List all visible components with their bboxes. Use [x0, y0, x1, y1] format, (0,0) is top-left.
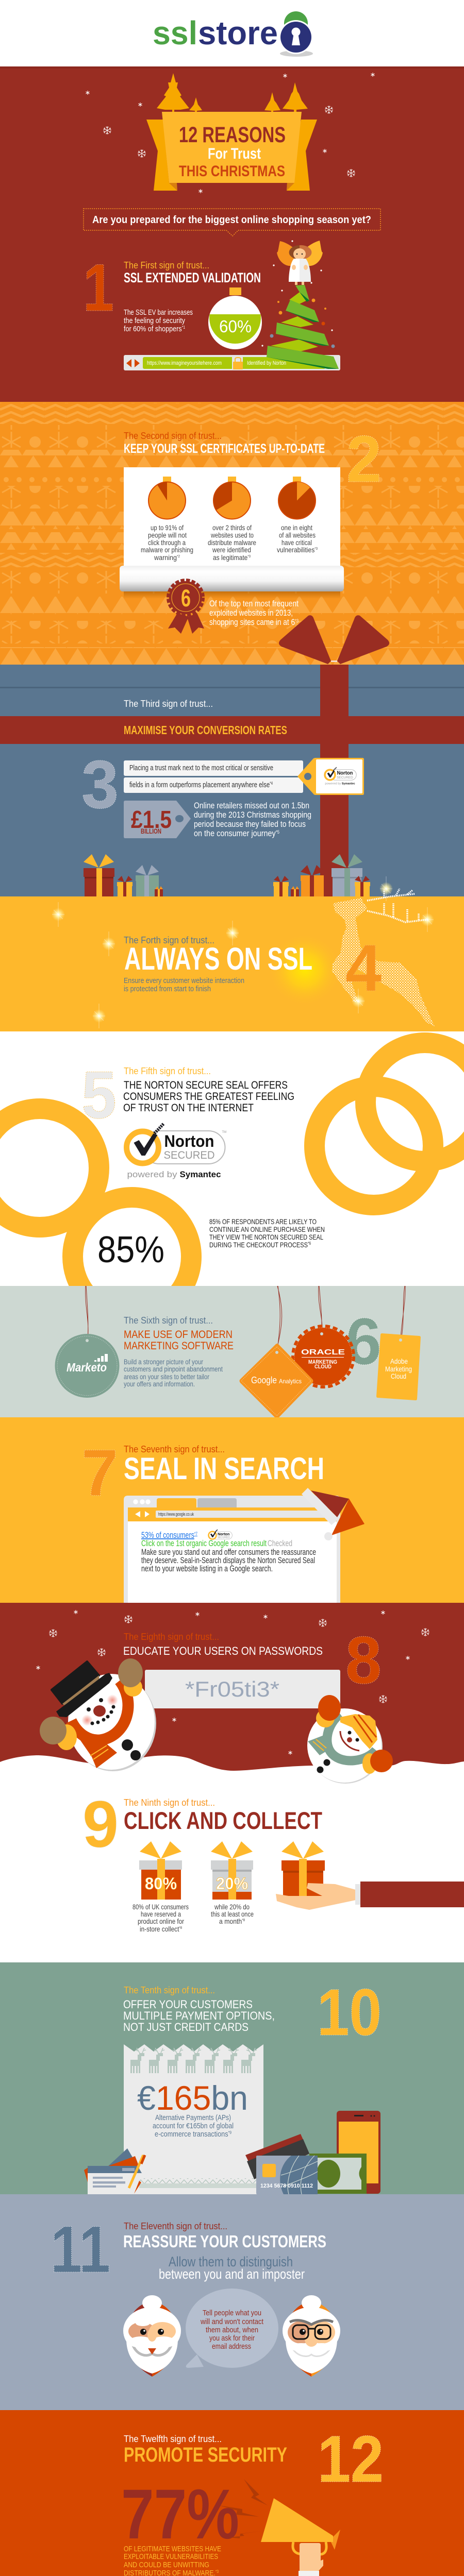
sign 2 heading: KEEP YOUR SSL CERTIFICATES UP-TO-DATE	[124, 442, 325, 456]
phone	[337, 2111, 380, 2194]
gift 80 percent	[139, 1841, 182, 1900]
Norton secured logo: Norton	[164, 1132, 214, 1150]
speech bubble	[186, 2289, 278, 2368]
price tag £1.5 billion: £1.5	[131, 806, 172, 834]
receipt caption: account for €165bn of global	[153, 2122, 234, 2130]
white paper scroll	[120, 467, 344, 599]
Oracle tag: MARKETING	[308, 1359, 337, 1365]
sign 4 body	[124, 977, 244, 993]
gift 80 caption: *8	[179, 1926, 182, 1930]
pie ornament 91%: malware or phishing	[141, 546, 193, 554]
Norton gift tag: SECURED	[337, 776, 353, 779]
77 percent figure: 77%	[121, 2475, 239, 2554]
sound bolts	[219, 2479, 268, 2538]
number 9: 9	[82, 1788, 119, 1861]
Adobe Marketing Cloud tag: Marketing	[385, 1365, 412, 1373]
Oracle tag: CLOUD	[314, 1364, 332, 1370]
front credit card	[256, 2156, 318, 2194]
sign 3 heading: MAXIMISE YOUR CONVERSION RATES	[124, 723, 287, 737]
pie ornament two thirds: over 2 thirds of	[212, 523, 252, 532]
sparkles	[52, 876, 434, 1028]
panel: sign 7 seal in search	[0, 1417, 464, 1603]
front credit card: 1234 5678 0910 1112	[260, 2183, 313, 2189]
gift 80 caption: in-store collect	[140, 1925, 186, 1933]
pie ornament 91%: *2	[177, 555, 180, 558]
hand holding megaphone	[296, 2543, 323, 2576]
ornament 60%	[208, 287, 262, 349]
pie ornament 91%: people will not	[148, 531, 187, 539]
pie ornament 91%: warning	[154, 553, 179, 562]
cheque book and pen	[84, 2148, 145, 2196]
speech bubble: email address	[212, 2342, 251, 2351]
interlocking gold rings	[0, 1043, 464, 1316]
gift 20 percent	[211, 1841, 253, 1900]
Norton gift tag: Symantec	[342, 783, 355, 786]
sign 11 kicker: The Eleventh sign of trust...	[124, 2221, 227, 2231]
pie ornament two thirds: websites used to	[210, 531, 254, 539]
sign 5 heading: THE NORTON SECURE SEAL OFFERS	[124, 1079, 288, 1091]
receipt	[124, 2044, 263, 2194]
77 percent caption: *3	[216, 2569, 219, 2574]
snow drift	[0, 1755, 464, 1962]
search result text: they deserve. Seal-in-Search displays the Norton Secured Seal	[141, 1555, 315, 1565]
gift bow	[279, 615, 389, 664]
pie ornament one in eight	[277, 477, 318, 554]
gift 80 percent: 80%	[145, 1874, 177, 1893]
Santa left	[123, 2295, 181, 2377]
pie ornament one in eight: of all websites	[279, 531, 316, 539]
number 11: 11	[51, 2213, 110, 2286]
mini Norton seal	[209, 1530, 232, 1539]
sparkling reindeer	[332, 889, 435, 1026]
Adobe Marketing Cloud tag: Adobe	[390, 1357, 408, 1365]
panel: title section	[0, 66, 464, 402]
Norton secured logo: powered by	[127, 1170, 177, 1179]
search result text: Checked	[268, 1538, 292, 1548]
sign 6 body: Build a stronger picture of your	[124, 1358, 203, 1366]
Marketo tag: Marketo	[67, 1361, 107, 1374]
85 percent caption	[209, 1217, 325, 1249]
sign 7 kicker: The Seventh sign of trust...	[124, 1444, 225, 1454]
sign 1 body text	[124, 308, 193, 333]
sign 1 body text: the feeling of security	[124, 316, 185, 325]
number 12: 12	[318, 2422, 384, 2496]
receipt caption: Alternative Payments (APs)	[155, 2113, 231, 2122]
sign 5 heading: OF TRUST ON THE INTERNET	[123, 1102, 254, 1114]
search result text: *7	[194, 1531, 197, 1536]
search result text: Make sure you stand out and offer consumers the reassurance	[141, 1547, 316, 1557]
pie ornament 91%: up to 91% of	[151, 523, 184, 532]
Adobe Marketing Cloud tag: Cloud	[391, 1372, 406, 1380]
pie ornament two thirds: were identified	[212, 546, 251, 554]
rosette caption	[209, 599, 299, 627]
sign 9 heading: CLICK AND COLLECT	[124, 1807, 322, 1834]
glow	[268, 933, 342, 1007]
Santa right with glasses	[283, 2295, 340, 2377]
sign 12 kicker: The Twelfth sign of trust...	[124, 2434, 222, 2444]
receipt caption	[153, 2113, 234, 2139]
gift 80 caption: 80% of UK consumers	[132, 1903, 189, 1911]
sign 11 heading: REASSURE YOUR CUSTOMERS	[123, 2232, 326, 2251]
Norton gift tag: powered by	[325, 783, 341, 786]
85 percent caption: 85% OF RESPONDENTS ARE LIKELY TO	[209, 1217, 317, 1226]
ornament 60%: 60%	[219, 317, 252, 336]
megaphone	[261, 2498, 340, 2554]
panel: sign 12 promote security	[0, 2410, 464, 2576]
sign 5 heading: CONSUMERS THE GREATEST FEELING	[123, 1091, 294, 1103]
panel: sign 11 reassure customers	[0, 2194, 464, 2410]
Oracle tag: ORACLE	[301, 1348, 345, 1357]
receipt caption: e-commerce transactions	[155, 2130, 241, 2139]
knitted background pattern	[0, 403, 464, 665]
sign 10 kicker: The Tenth sign of trust...	[124, 1985, 215, 1995]
browser window	[124, 1496, 340, 1603]
gift 20 caption: a month	[219, 1917, 245, 1925]
number 1: 1	[83, 250, 114, 325]
sign 11 subheading	[159, 2254, 305, 2282]
hand and sleeve	[276, 1882, 464, 1910]
logo keyhole	[279, 20, 313, 54]
sign 1 heading: SSL EXTENDED VALIDATION	[124, 270, 261, 285]
search result text: next to your website listing in a Google search.	[141, 1564, 273, 1573]
gift 80 caption	[132, 1903, 189, 1933]
EV address bar: https://www.imagineyoursitehere.com	[147, 360, 222, 366]
sign 10 heading	[123, 1998, 275, 2033]
receipt caption: *9	[228, 2130, 231, 2135]
title: this christmas: THIS CHRISTMAS	[179, 163, 285, 180]
77 percent caption	[124, 2545, 221, 2576]
gift 20 caption	[211, 1903, 254, 1925]
retailer statistic text: Online retailers missed out on 1.5bn	[194, 801, 309, 810]
number 2: 2	[346, 422, 382, 496]
pie ornament one in eight: vulnerabilities	[277, 546, 321, 554]
pie ornament two thirds: distribute malware	[208, 538, 256, 547]
password box	[145, 1670, 340, 1708]
sign 6 kicker: The Sixth sign of trust...	[124, 1315, 213, 1326]
banner front	[162, 112, 302, 183]
search result text: 53% of consumers	[141, 1530, 214, 1540]
sign 4 kicker: The Forth sign of trust...	[124, 935, 214, 945]
logo wordmark store: store	[198, 14, 278, 52]
rosette number 6	[168, 581, 204, 634]
77 percent caption: OF LEGITIMATE WEBSITES HAVE	[124, 2545, 221, 2553]
sign 7 heading: SEAL IN SEARCH	[124, 1451, 324, 1486]
sign 4 body: is protected from start to finish	[124, 985, 211, 993]
Norton secured logo: Symantec	[179, 1170, 221, 1179]
speech bubble: you ask for their	[209, 2334, 255, 2343]
Norton gift tag: Norton	[337, 771, 353, 776]
password box: *Fr05ti3*	[185, 1677, 279, 1701]
gift 20 caption: *8	[242, 1919, 245, 1922]
gift 20 percent: 20%	[216, 1874, 248, 1893]
sign 5 kicker: The Fifth sign of trust...	[124, 1066, 211, 1076]
Adobe Marketing Cloud tag	[376, 1333, 421, 1400]
sign 6 heading: MARKETING SOFTWARE	[124, 1340, 234, 1352]
Norton gift tag	[297, 758, 364, 795]
sign 1 body text: for 60% of shoppers	[124, 325, 193, 333]
pine trees	[157, 73, 308, 112]
speech bubble: Tell people what you	[203, 2309, 261, 2317]
mini Norton seal: Norton	[218, 1532, 230, 1536]
panel: sign 2 certificates	[0, 402, 464, 665]
snowman with top hat	[40, 1658, 156, 1771]
header: SSL Store logo	[0, 0, 464, 66]
77 percent caption: EXPLOITABLE VULNERABILITIES	[124, 2552, 218, 2561]
search result text	[141, 1530, 316, 1573]
browser window: https://www.google.co.uk	[158, 1512, 194, 1517]
gift 20 caption: while 20% do	[214, 1903, 250, 1911]
sign 6 body: your offers and information.	[124, 1380, 195, 1388]
gift ribbon horizontal	[0, 716, 464, 744]
reindeer row	[130, 2048, 257, 2073]
amount €165bn: €165bn	[137, 2079, 248, 2117]
sign 6 body	[124, 1358, 223, 1388]
panel: sign 9 click and collect	[82, 1788, 464, 1933]
panel: sign 8 passwords	[0, 1603, 464, 1962]
price tag £1.5 billion	[124, 801, 191, 838]
snowflakes	[86, 73, 374, 193]
retailer statistic text	[194, 801, 311, 838]
sign 10 heading: MULTIPLE PAYMENT OPTIONS,	[123, 2009, 275, 2022]
sign 11 subheading: between you and an imposter	[159, 2266, 305, 2282]
85 percent caption: THEY VIEW THE NORTON SECURED SEAL	[209, 1233, 323, 1241]
mini Norton seal: SECURED	[218, 1536, 230, 1539]
77 percent caption: AND COULD BE UNWITTING	[124, 2561, 209, 2569]
pie ornament two thirds: *3	[247, 555, 251, 558]
sign 4 body: Ensure every customer website interaction	[124, 977, 244, 985]
pie ornament one in eight: *3	[314, 547, 318, 551]
pie ornament one in eight: one in eight	[281, 523, 312, 532]
Oracle tag	[293, 1327, 353, 1386]
number 10: 10	[317, 1976, 382, 2049]
gift 80 caption: product online for	[138, 1917, 184, 1925]
rosette caption: shopping sites came in at 6	[209, 617, 316, 627]
number 3: 3	[81, 747, 119, 822]
gift 20 caption: this at least once	[211, 1910, 254, 1918]
EV address bar	[124, 355, 340, 370]
85 percent caption: *6	[308, 1241, 311, 1246]
retailer statistic text: during the 2013 Christmas shopping	[194, 810, 311, 820]
pie ornament 91%	[141, 477, 193, 562]
sign 9 kicker: The Ninth sign of trust...	[124, 1798, 215, 1808]
gift held in hand	[281, 1841, 325, 1900]
gift ribbon vertical	[320, 665, 349, 896]
back credit card	[245, 2134, 309, 2181]
title: for trust: For Trust	[208, 145, 261, 162]
85 percent caption: CONTINUE AN ONLINE PURCHASE WHEN	[209, 1225, 325, 1233]
sign 10 heading: NOT JUST CREDIT CARDS	[123, 2021, 248, 2033]
sign 6 heading	[124, 1329, 234, 1352]
trust mark statement bars: fields in a form outperforms placement anywhere else	[129, 781, 313, 789]
speech bubble: them about, when	[206, 2326, 258, 2334]
retailer statistic text: on the consumer journey	[194, 828, 290, 838]
tag strings	[86, 1286, 405, 1352]
price tag £1.5 billion: BILLION	[141, 827, 161, 835]
sign 11 subheading: Allow them to distinguish	[169, 2254, 293, 2269]
sign 12 heading: PROMOTE SECURITY	[124, 2444, 287, 2466]
title: 12 reasons: 12 REASONS	[179, 123, 286, 147]
sign 6 body: customers and pinpoint abandonment	[124, 1365, 223, 1373]
Google Analytics tag	[239, 1344, 313, 1418]
pie ornament two thirds	[208, 477, 256, 562]
logo green arc	[284, 11, 308, 35]
rosette caption: Of the top ten most frequent	[209, 599, 299, 608]
sign 6 body: areas on your sites to better tailor	[124, 1372, 209, 1381]
trust mark statement bars	[124, 760, 303, 793]
rosette caption: *3	[295, 618, 299, 623]
retailer statistic text: *5	[276, 829, 279, 835]
sign 8 kicker: The Eighth sign of trust...	[124, 1632, 219, 1642]
sign 1 body text: The SSL EV bar increases	[124, 308, 193, 317]
panel: sign 5 Norton seal	[0, 1031, 464, 1316]
pie ornament two thirds: as legitimate	[213, 553, 254, 562]
sign 10 heading: OFFER YOUR CUSTOMERS	[123, 1998, 253, 2011]
Marketo tag	[55, 1334, 120, 1398]
gift 80 caption: have reserved a	[141, 1910, 181, 1918]
tree decorations	[261, 240, 335, 348]
Google Analytics tag: Google	[251, 1375, 277, 1385]
pie ornament one in eight: have critical	[281, 538, 312, 547]
sign 5 heading	[123, 1079, 294, 1114]
number 4: 4	[345, 931, 382, 1005]
sign 1 body text: *1	[182, 325, 185, 330]
rosette number 6: 6	[181, 584, 191, 612]
rosette caption: exploited websites in 2013,	[209, 608, 293, 618]
panel: sign 6 marketing software	[0, 1286, 464, 1418]
question callout box: Are you prepared for the biggest online shopping season yet?	[92, 214, 371, 226]
sign 3 kicker: The Third sign of trust...	[124, 699, 213, 709]
Norton secured logo: TM	[222, 1131, 226, 1134]
sign 1 kicker: The First sign of trust...	[124, 260, 209, 270]
trust mark statement bars: Placing a trust mark next to the most critical or sensitive	[129, 764, 273, 772]
gifts right group	[273, 854, 370, 896]
number 6: 6	[345, 1305, 382, 1379]
sign 2 kicker: The Second sign of trust...	[124, 431, 222, 441]
number 5: 5	[81, 1057, 117, 1132]
origami ribbon tree	[267, 285, 339, 369]
Google Analytics tag: Analytics	[279, 1378, 302, 1385]
speech bubble: will and won't contact	[200, 2317, 264, 2326]
panel: sign 4 always on SSL	[0, 876, 464, 1031]
snowman with bobble hat	[307, 1695, 393, 1784]
banknote	[309, 2154, 367, 2194]
sign 8 heading: EDUCATE YOUR USERS ON PASSWORDS	[123, 1645, 323, 1657]
logo wordmark ssl: ssl	[153, 14, 197, 52]
EV address bar: Identified by Norton	[247, 360, 286, 366]
angel	[277, 241, 323, 285]
panel: sign 10 payment options	[0, 1962, 464, 2196]
number 8: 8	[345, 1622, 382, 1698]
gifts left group	[84, 854, 163, 896]
number 7: 7	[81, 1436, 118, 1510]
Norton secured logo: SECURED	[164, 1149, 214, 1161]
sign 4 heading: ALWAYS ON SSL	[124, 941, 312, 976]
85 percent caption: DURING THE CHECKOUT PROCESS	[209, 1241, 334, 1249]
search result text: Click on the 1st organic Google search result	[141, 1538, 267, 1548]
trust mark statement bars: *4	[270, 781, 273, 786]
pie ornament 91%: click through a	[148, 538, 186, 547]
Norton secured logo	[127, 1124, 226, 1179]
retailer statistic text: period because they failed to focus	[194, 819, 306, 829]
banner back folds	[146, 120, 317, 191]
panel: sign 3 conversion rates	[0, 665, 464, 896]
85 percent figure: 85%	[97, 1229, 164, 1270]
Santa hat on browser	[302, 1488, 364, 1540]
logo shadow	[280, 50, 313, 57]
snowflakes	[36, 1610, 429, 1755]
sign 6 heading: MAKE USE OF MODERN	[124, 1329, 233, 1341]
question callout box	[84, 209, 380, 236]
